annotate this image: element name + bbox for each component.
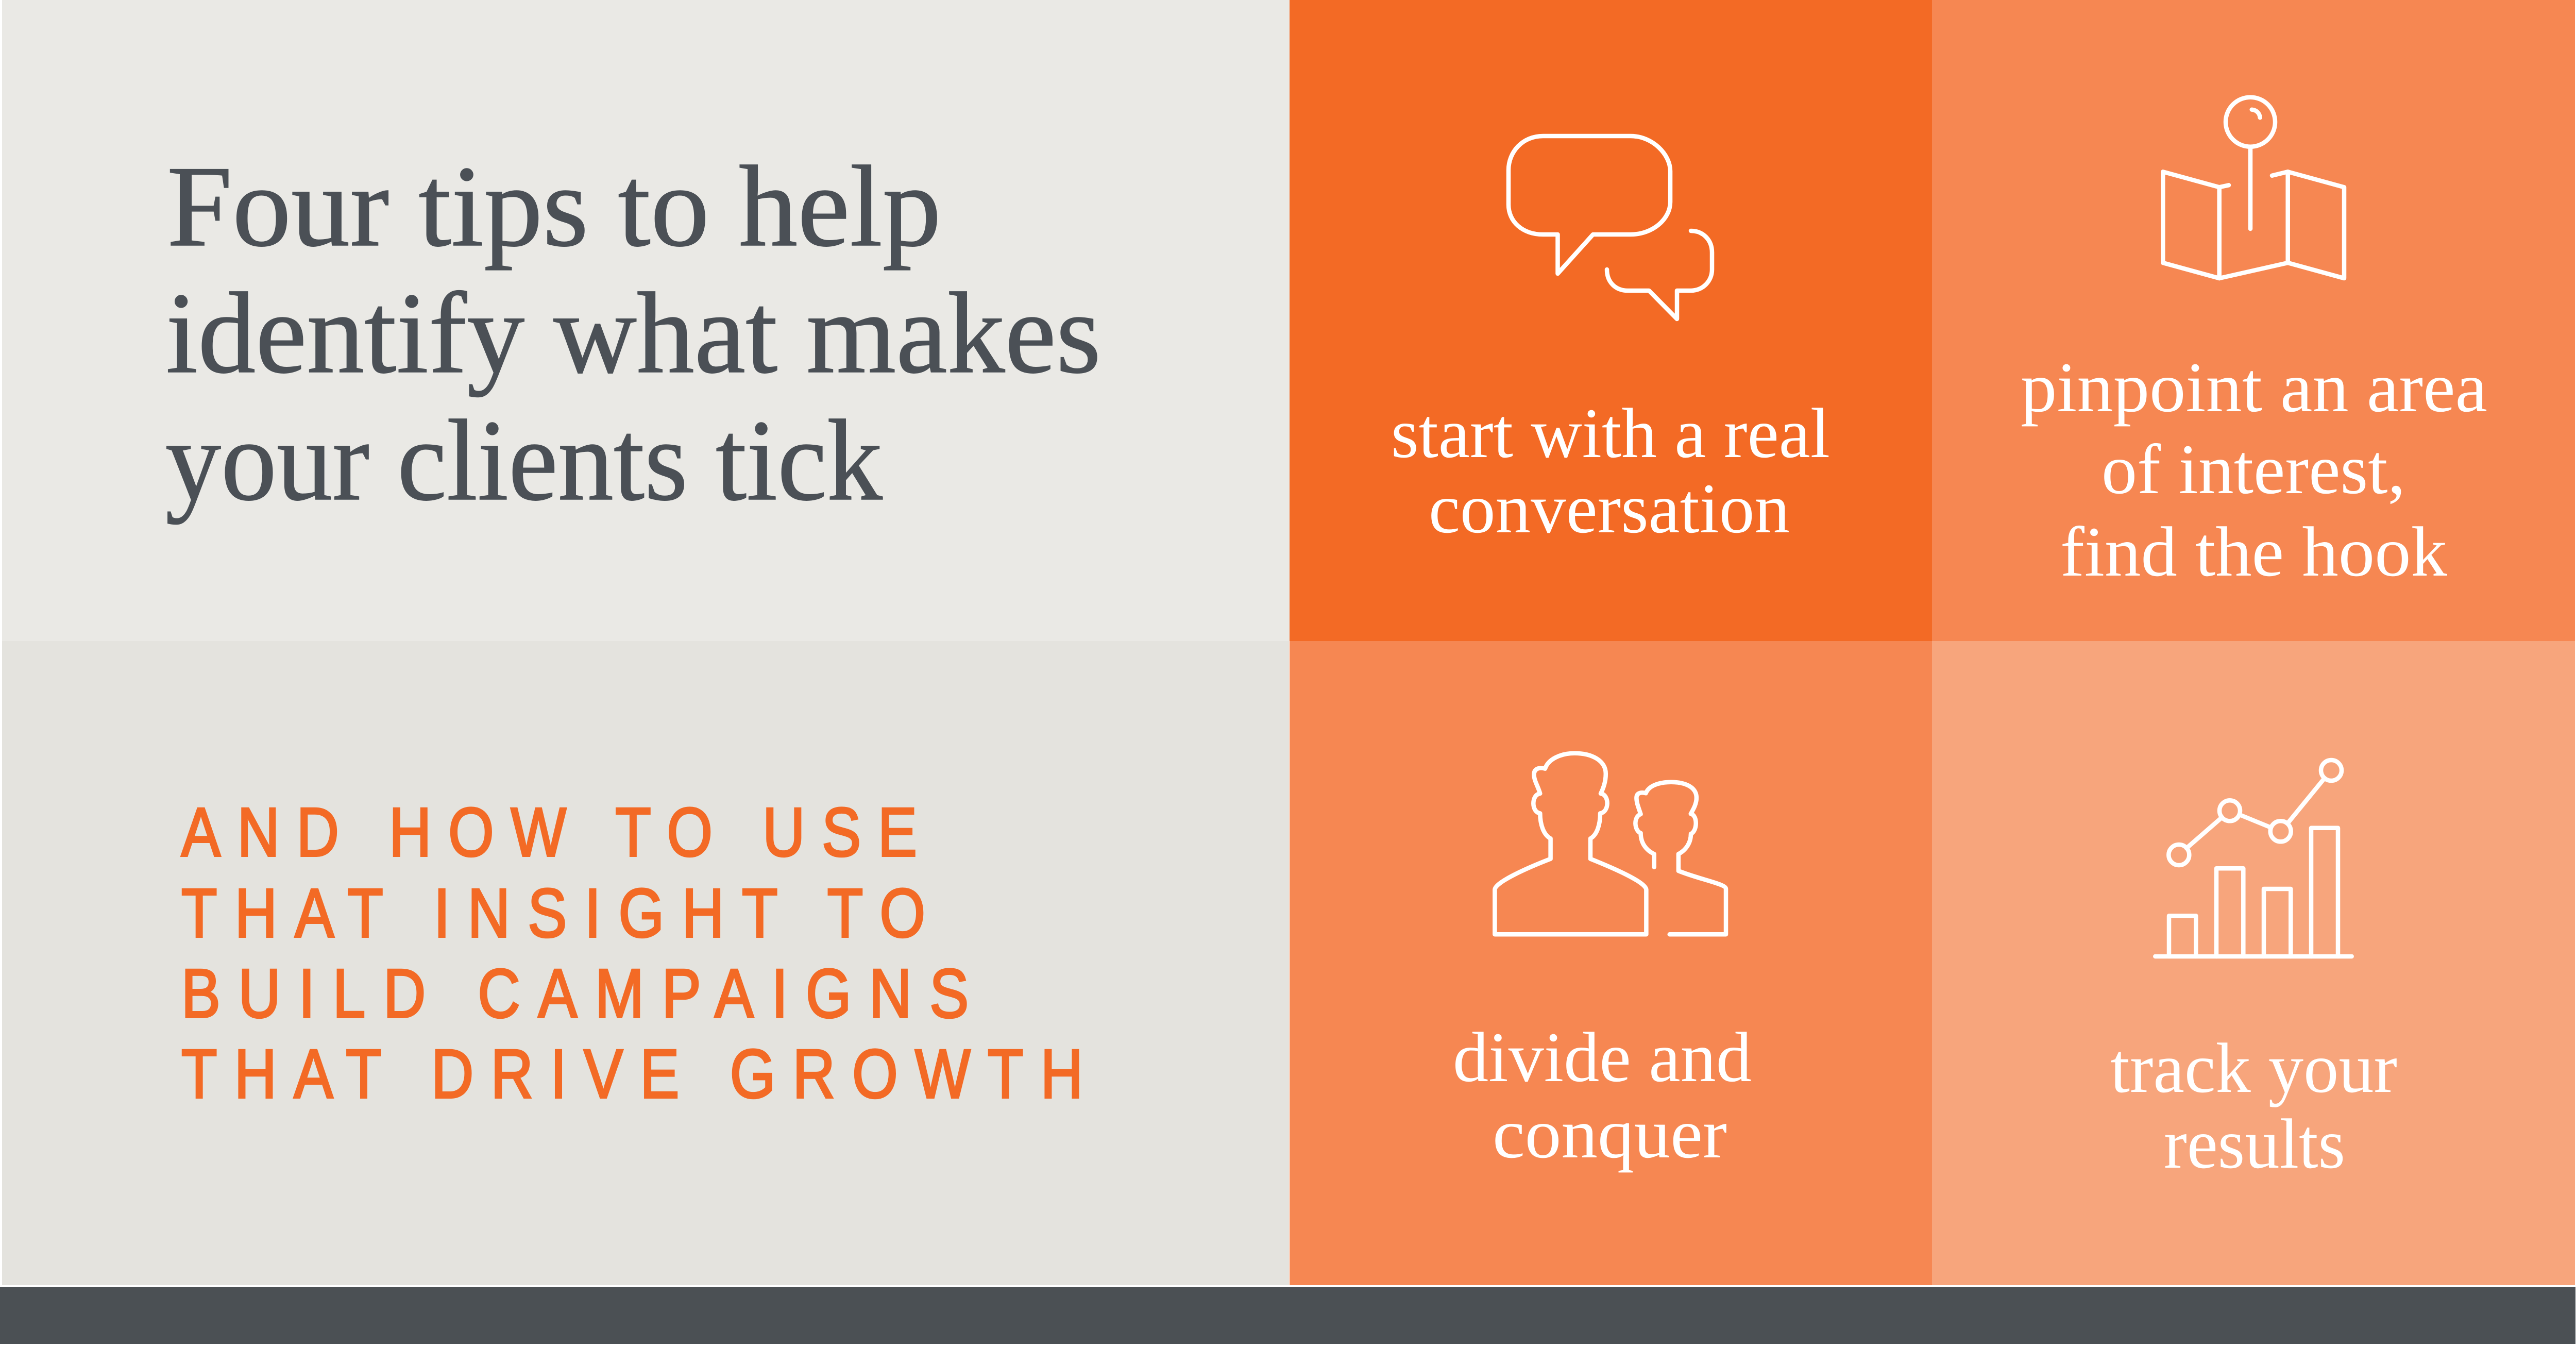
subtitle text (181, 794, 1083, 1113)
icon: speech bubbles (1509, 136, 1712, 319)
panel: title (2, 0, 1290, 641)
tip text: divide and (1453, 1018, 1752, 1097)
tip text: track your (2110, 1029, 2397, 1107)
panel: divide and conquer (1290, 641, 1932, 1285)
panel: subtitle (2, 641, 1289, 1285)
panel: pinpoint an area of interest (1932, 0, 2575, 641)
icon: two people (1495, 753, 1726, 934)
title: Four tips to help (167, 142, 941, 271)
tip text: find the hook (2060, 512, 2447, 591)
tip text (1453, 1018, 1752, 1173)
tip text: pinpoint an area (2021, 348, 2487, 427)
tip text: start with a real (1391, 394, 1830, 473)
subtitle text: AND HOW TO USE (181, 794, 917, 871)
subtitle text: THAT INSIGHT TO (181, 874, 925, 952)
tile background (1290, 0, 1932, 641)
title panel background (2, 0, 1290, 641)
panel: track your results (1932, 641, 2575, 1285)
tip text (2021, 348, 2487, 591)
subtitle text: BUILD CAMPAIGNS (181, 955, 969, 1032)
tile background (1932, 0, 2575, 641)
tip text: results (2164, 1104, 2345, 1183)
tip text: conversation (1429, 469, 1790, 548)
subtitle text: THAT DRIVE GROWTH (181, 1035, 1083, 1113)
tip text (1391, 394, 1830, 548)
title: identify what makes (166, 268, 1101, 397)
tile background (1290, 641, 1932, 1285)
tip text: conquer (1493, 1094, 1727, 1173)
title (165, 142, 1101, 525)
tip text (2110, 1029, 2397, 1183)
icon: map and pin (2163, 97, 2344, 278)
panel: start with a real conversation (1290, 0, 1932, 641)
title: your clients tick (165, 396, 883, 525)
tile background (1932, 641, 2575, 1285)
icon: line and bar chart (2155, 760, 2352, 956)
subtitle panel background (2, 641, 1289, 1285)
footer bar (0, 1287, 2575, 1344)
tip text: of interest, (2102, 430, 2405, 509)
